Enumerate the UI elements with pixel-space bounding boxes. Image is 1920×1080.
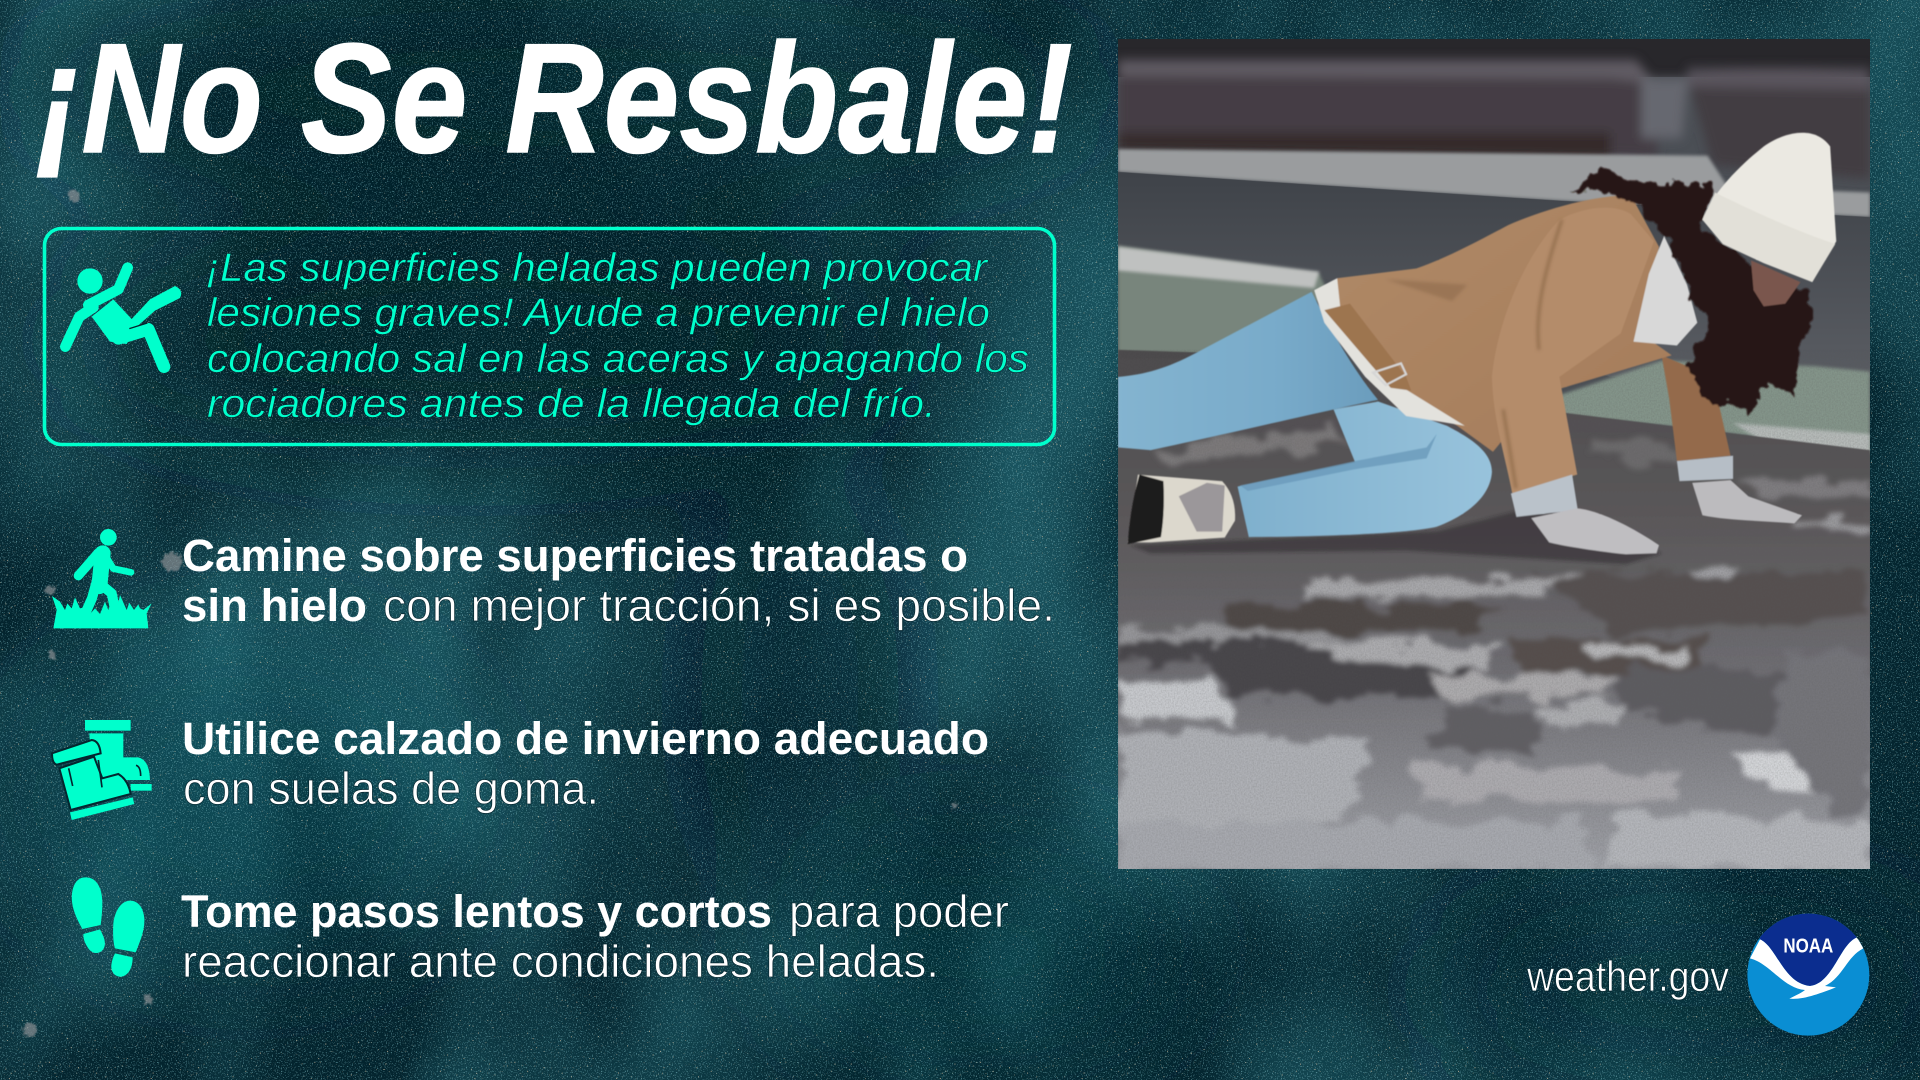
callout text: rociadores antes de la llegada del frío.	[207, 382, 936, 426]
tip 1 text	[182, 530, 1055, 631]
photo: woman	[1118, 133, 1836, 564]
weather.gov: weather.gov	[1526, 953, 1729, 1001]
boot	[1128, 475, 1235, 542]
gloves	[1531, 508, 1659, 554]
callout text: lesiones graves! Ayude a prevenir el hielo	[207, 291, 990, 335]
tip 2 text: con suelas de goma.	[183, 763, 599, 814]
callout text: colocando sal en las aceras y apagando los	[207, 337, 1029, 381]
contact shadow	[1130, 507, 1662, 564]
callout panel: ice injury warning	[44, 228, 1054, 444]
tip 1 text: Camine sobre superficies tratadas o	[182, 530, 968, 581]
tip 2 text	[182, 713, 989, 814]
jeans	[1118, 292, 1378, 450]
hat	[1702, 133, 1836, 282]
photo backdrop: trees, hedge, road, grass	[1118, 39, 1870, 869]
NOAA logo: NOAA	[1783, 935, 1833, 958]
collar	[1633, 236, 1697, 346]
face	[1751, 260, 1801, 306]
tip 3 text: Tome pasos lentos y cortos	[181, 886, 772, 937]
icon: person slipping	[65, 268, 181, 367]
tip 3: short slow steps	[72, 877, 1009, 987]
callout text	[206, 246, 1029, 426]
tip 1 text: sin hielo	[182, 580, 367, 631]
shearling trim and belt	[1314, 278, 1465, 426]
callout text: ¡Las superficies heladas pueden provocar	[206, 246, 989, 290]
icon: footprints	[72, 877, 144, 977]
photo: icy pavement	[1118, 350, 1870, 869]
photo: woman slipping on icy sidewalk	[1118, 39, 1870, 869]
tip 3 text: reaccionar ante condiciones heladas.	[182, 936, 939, 987]
cuffs	[1511, 475, 1578, 517]
tip 3 text: para poder	[789, 886, 1009, 937]
callout border	[44, 228, 1054, 444]
tip 3 text	[181, 886, 1009, 987]
icon: person walking through grass	[52, 529, 152, 628]
jacket body	[1324, 195, 1672, 452]
title: ¡No Se Resbale!	[36, 12, 1073, 186]
tip 1 text: con mejor tracción, si es posible.	[383, 580, 1055, 631]
tip 2 text: Utilice calzado de invierno adecuado	[182, 713, 989, 764]
jacket back arm	[1662, 355, 1731, 461]
NOAA logo	[1747, 900, 1869, 1036]
tip 2: proper winter footwear	[52, 713, 989, 820]
icon: winter boots	[52, 720, 152, 820]
tip 1: walk on treated surfaces	[52, 529, 1055, 631]
hair	[1572, 168, 1812, 415]
